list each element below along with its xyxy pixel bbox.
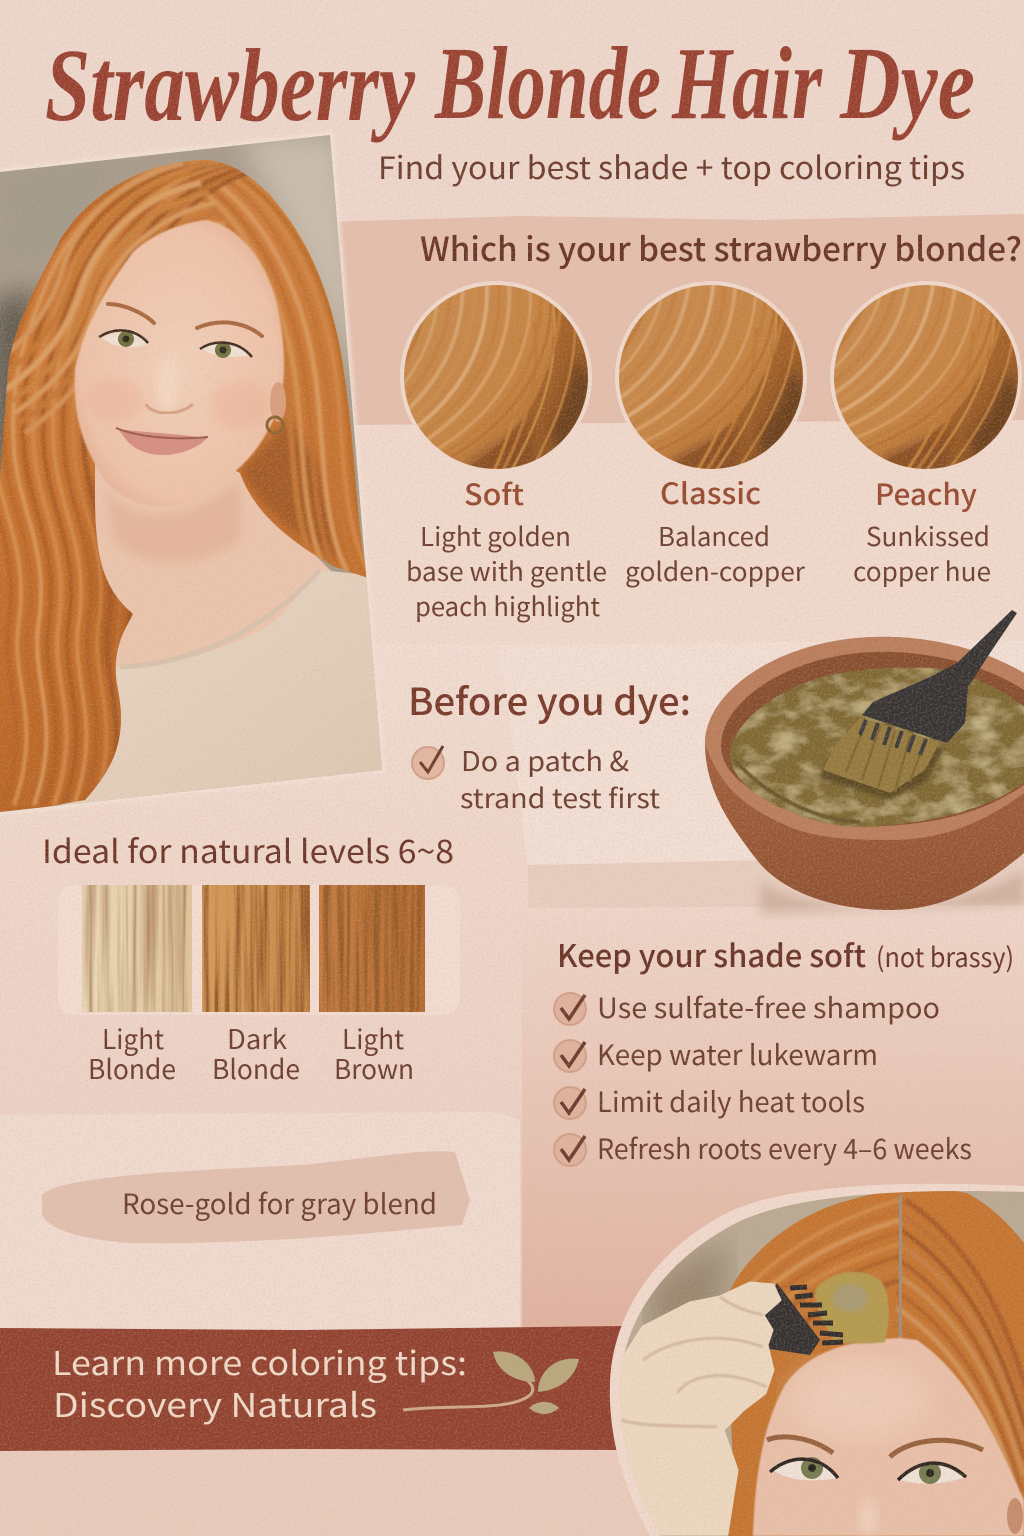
- shade: soft: Soft: [464, 472, 525, 514]
- banner: Learn more coloring tips:: [52, 1337, 467, 1385]
- parting: [899, 1195, 902, 1340]
- swatch labels: Light: [342, 1018, 404, 1057]
- shade: soft: Light golden: [420, 517, 571, 554]
- heading: keep shade soft: (not brassy): [876, 936, 1014, 975]
- title: [45, 26, 975, 143]
- shade: classic: Balanced: [658, 517, 770, 554]
- check item: heat: Limit daily heat tools: [597, 1081, 865, 1121]
- brush: [818, 610, 1017, 800]
- forehead and face: [753, 1338, 1024, 1536]
- swatch labels: Blonde: [212, 1048, 300, 1087]
- glove: [620, 1283, 780, 1534]
- shade: peachy: Peachy: [875, 472, 977, 514]
- heading: natural levels: Ideal for natural levels 6~8: [42, 827, 454, 873]
- shade: peachy: copper hue: [853, 552, 991, 589]
- panel: shade descriptions: [345, 420, 1024, 646]
- check item: shampoo: Use sulfate-free shampoo: [597, 987, 940, 1027]
- text: patch test: Do a patch &: [461, 740, 629, 779]
- heading: best shade: Which is your best strawberry blonde?: [420, 223, 1022, 271]
- shade: soft: peach highlight: [415, 587, 600, 624]
- callout: rose-gold: Rose-gold for gray blend: [122, 1183, 437, 1223]
- eyebrows: [108, 304, 154, 323]
- text: patch test: strand test first: [460, 777, 660, 816]
- swatch labels: Light: [102, 1018, 164, 1057]
- shadow: bowl surface: [528, 855, 1024, 908]
- icon: leaf sprig: [403, 1351, 579, 1414]
- checklist: [554, 987, 972, 1168]
- neck and chest: [95, 463, 332, 668]
- banner: [0, 1326, 622, 1451]
- heading: keep shade soft: Keep your shade soft: [557, 931, 866, 976]
- text: patch test: [460, 740, 660, 816]
- shade: classic: golden-copper: [625, 552, 806, 589]
- title: Strawberry: [45, 28, 416, 143]
- panel: left column: [0, 645, 530, 1115]
- inner wall: [721, 652, 1024, 827]
- photo: applying dye: [610, 1184, 1024, 1536]
- title: Hair: [671, 26, 823, 141]
- swatch labels: Dark: [227, 1018, 287, 1057]
- panel: lower left: [0, 1112, 520, 1330]
- swatch: peachy: [830, 281, 1022, 469]
- swatch labels: [88, 1018, 414, 1087]
- shade: peachy: Sunkissed: [866, 517, 990, 554]
- portrait photo: [0, 135, 385, 815]
- dye paste: [730, 668, 1024, 827]
- portrait frame: [0, 135, 382, 812]
- hair silhouette: [0, 155, 385, 815]
- title: Blonde: [434, 26, 661, 141]
- heading: keep shade soft: [557, 931, 1014, 976]
- hair level swatches: [58, 885, 460, 1015]
- panel: keep soft: [522, 895, 1024, 1330]
- subtitle: Find your best shade + top coloring tips: [378, 143, 965, 188]
- title: Dye: [839, 26, 975, 141]
- check: patch test: [412, 746, 444, 779]
- callout: rose-gold: [42, 1151, 470, 1243]
- smile: [118, 429, 207, 455]
- left side locks: [0, 516, 14, 702]
- shade: classic: [625, 471, 806, 589]
- panel: before you dye: [500, 640, 1024, 868]
- shade: soft: base with gentle: [406, 552, 607, 589]
- swatch: classic: [615, 281, 807, 469]
- swatch: light blonde: [82, 885, 192, 1012]
- face: [75, 220, 286, 507]
- eyebrows: [767, 1437, 833, 1453]
- check item: water: Keep water lukewarm: [597, 1034, 878, 1074]
- dye patch: [815, 1272, 889, 1344]
- swatch: soft: [400, 281, 592, 469]
- right side locks: [204, 199, 313, 554]
- panel: shade band: [330, 214, 1024, 425]
- swatch labels: Blonde: [88, 1048, 176, 1087]
- bowl of dye: [705, 610, 1024, 915]
- rim: [705, 637, 1024, 840]
- shade: soft: [406, 472, 607, 624]
- swatch labels: Brown: [334, 1048, 414, 1087]
- banner: Discovery Naturals: [53, 1379, 377, 1427]
- heading: before you dye: Before you dye:: [408, 672, 691, 726]
- earring: [267, 417, 283, 433]
- eyes: [773, 1460, 837, 1480]
- swatch: light brown: [319, 885, 425, 1012]
- sweater: [60, 570, 385, 812]
- eyes: [102, 333, 148, 347]
- shade swatches: [400, 281, 1022, 469]
- top sweep: [10, 162, 184, 356]
- brush: [760, 1283, 843, 1355]
- hair: [728, 1189, 1024, 1536]
- check item: roots: Refresh roots every 4–6 weeks: [597, 1128, 972, 1168]
- nose: [157, 362, 176, 410]
- shade: classic: Classic: [660, 471, 761, 513]
- swatch: dark blonde: [202, 885, 310, 1012]
- shade: peachy: [853, 472, 991, 589]
